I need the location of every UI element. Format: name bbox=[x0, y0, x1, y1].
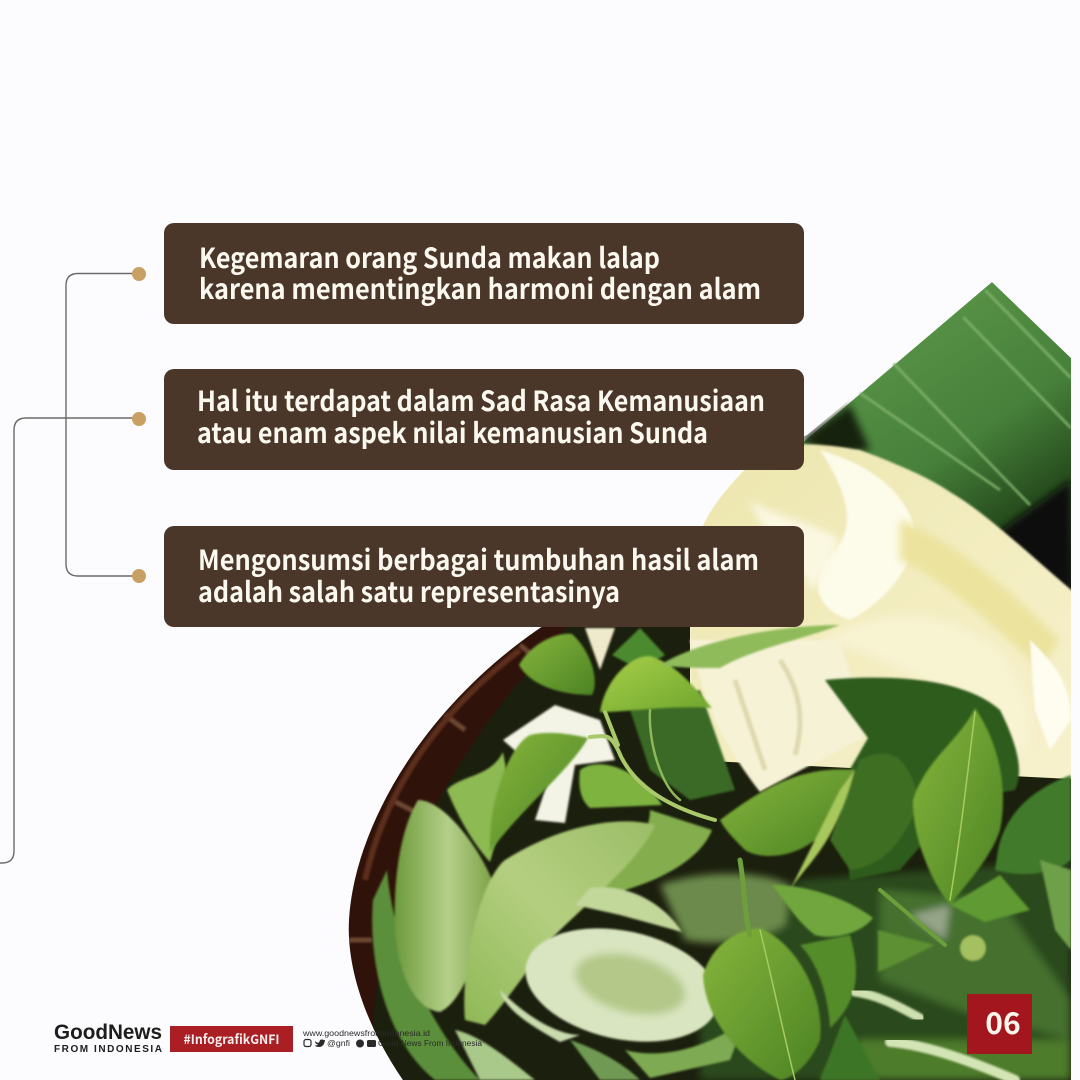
text panel 3: Mengonsumsi berbagai tumbuhan hasil alam bbox=[198, 539, 759, 579]
text panel 3: adalah salah satu representasinya bbox=[198, 571, 620, 611]
logo: GoodNews From Indonesia: FROM INDONESIA bbox=[54, 1044, 162, 1055]
logo: GoodNews From Indonesia bbox=[54, 1021, 162, 1055]
connector line: second item to lower left bbox=[0, 418, 134, 863]
page number badge bbox=[967, 994, 1032, 1054]
hashtag badge bbox=[170, 1026, 293, 1052]
cucumber slice bbox=[524, 926, 736, 1080]
text panel 3 bbox=[164, 526, 804, 627]
page number badge: 06 bbox=[985, 999, 1021, 1043]
basil leaves bbox=[490, 625, 1071, 1080]
website and social handles: @gnfi bbox=[327, 1039, 350, 1048]
connector line: first and third items bbox=[66, 274, 134, 576]
logo: GoodNews From Indonesia: GoodNews bbox=[54, 1021, 162, 1044]
blurred background greens bbox=[660, 860, 1071, 1080]
text panel 2 bbox=[164, 369, 804, 470]
website and social handles: www.goodnewsfromindonesia.id bbox=[302, 1029, 430, 1038]
bullet dot 2 bbox=[132, 412, 146, 426]
website and social handles bbox=[302, 1029, 483, 1048]
icon: facebook bbox=[356, 1040, 364, 1048]
bullet dot 3 bbox=[132, 569, 146, 583]
woven bowl rim bbox=[340, 620, 1080, 1080]
chayote and cucumber slices bbox=[372, 752, 712, 1080]
icon: twitter bbox=[314, 1040, 325, 1047]
icon: instagram bbox=[304, 1040, 311, 1046]
text panel 2: Hal itu terdapat dalam Sad Rasa Kemanusiaan bbox=[197, 380, 765, 420]
hashtag badge: #InfografikGNFI bbox=[184, 1029, 280, 1048]
cabbage bbox=[690, 444, 1080, 800]
text panel 2: atau enam aspek nilai kemanusian Sunda bbox=[197, 412, 708, 452]
banana leaf bbox=[804, 282, 1071, 592]
website and social handles: Good News From Indonesia bbox=[378, 1039, 483, 1048]
text panel 1: Kegemaran orang Sunda makan lalap bbox=[199, 237, 660, 277]
bullet dot 1 bbox=[132, 267, 146, 281]
dark green back leaves bbox=[612, 628, 1019, 880]
white petals bbox=[503, 628, 868, 823]
text panel 1 bbox=[164, 223, 804, 324]
text panel 1: karena mementingkan harmoni dengan alam bbox=[199, 268, 761, 308]
photo: bowl of lalap vegetables bbox=[340, 282, 1080, 1080]
icon: youtube bbox=[367, 1040, 376, 1047]
cucumber strips and stems bbox=[590, 710, 1015, 1080]
